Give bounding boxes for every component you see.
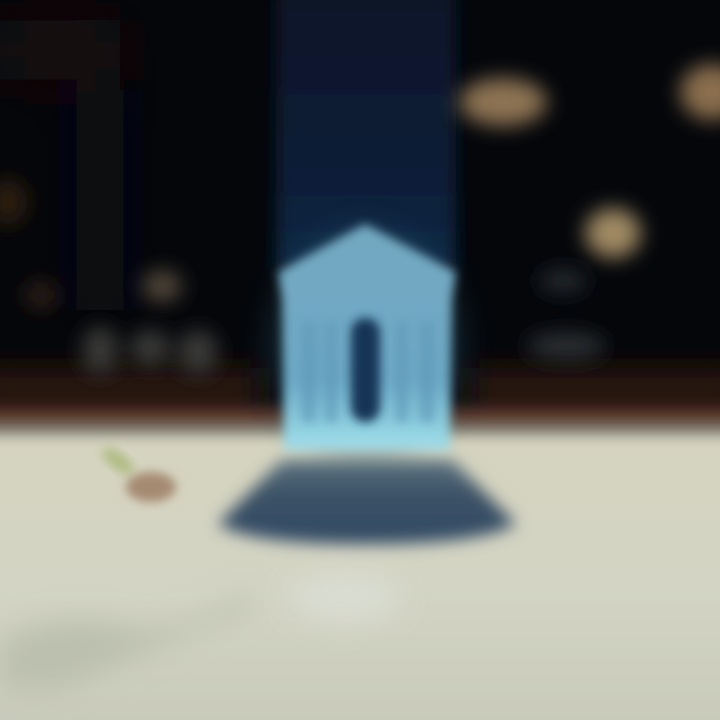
light: far left small: [24, 280, 58, 310]
floor markings: [0, 590, 250, 690]
light: far left upper: [0, 178, 28, 226]
building door: [351, 318, 380, 422]
floor: [0, 410, 720, 720]
background: dim left arch structure: [0, 20, 125, 310]
building columns: [302, 322, 434, 422]
bank building: [278, 224, 456, 450]
building base: [218, 460, 516, 544]
building body: [278, 224, 456, 450]
plant on floor: [98, 443, 176, 502]
light: right round: [585, 208, 641, 258]
light: top centre-right: [459, 78, 547, 126]
light: right grey lower: [526, 332, 606, 360]
light: right grey upper: [538, 268, 588, 294]
light column behind the building: [276, 0, 456, 270]
plant pot: [126, 472, 176, 502]
building glow: [266, 225, 466, 465]
plant leaf: [98, 443, 138, 479]
reddish horizon band: [0, 368, 720, 412]
floor glow under building: [290, 573, 400, 623]
light: left small: [142, 270, 182, 302]
light: left cluster: [82, 326, 218, 374]
background lights: [0, 64, 720, 374]
light: top right: [680, 64, 720, 120]
